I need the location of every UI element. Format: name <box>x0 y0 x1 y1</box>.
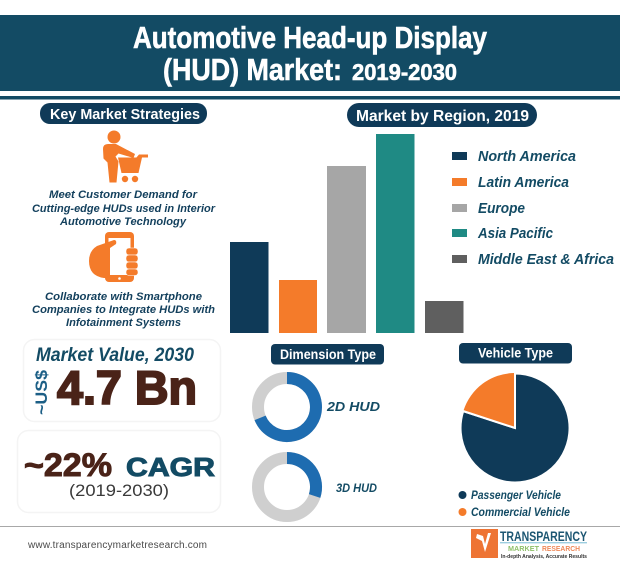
heading: dimension type: Dimension Type <box>280 347 376 362</box>
donut chart: 2D HUD <box>258 378 316 436</box>
heading: market by region: Market by Region, 2019 <box>356 108 529 125</box>
logo <box>471 529 587 560</box>
panel: CAGR: CAGR <box>126 452 215 482</box>
panel: market value: 4.7 Bn <box>57 361 197 414</box>
chart legend: regions: Europe <box>478 200 525 217</box>
panel: market value <box>24 340 220 422</box>
chart legend: regions: North America <box>478 148 576 165</box>
text: strategy one: Automotive Technology <box>59 216 187 228</box>
label: 3D HUD: 3D HUD <box>336 481 377 495</box>
logo: In-depth Analysis, Accurate Results <box>501 554 587 560</box>
heading: vehicle type <box>459 343 572 364</box>
heading: key market strategies: Key Market Strategies <box>50 107 200 123</box>
heading: key market strategies <box>40 103 207 124</box>
logo: MARKET <box>508 546 540 553</box>
chart legend: regions <box>452 148 614 268</box>
footer divider <box>0 526 620 527</box>
title <box>133 20 488 87</box>
website url: www.transparencymarketresearch.com <box>27 540 207 551</box>
text: strategy one: Meet Customer Demand for <box>49 189 198 201</box>
chart legend: vehicle type <box>458 490 571 519</box>
title: Automotive Head-up Display <box>133 20 488 55</box>
heading: dimension type <box>271 344 384 364</box>
chart legend: vehicle type: Passenger Vehicle <box>471 490 562 502</box>
chart legend: regions: Middle East & Africa <box>478 251 614 268</box>
heading: vehicle type: Vehicle Type <box>478 346 553 360</box>
logo: TRANSPARENCY <box>500 529 587 544</box>
label: 2D HUD: 2D HUD <box>326 399 381 414</box>
heading: market by region <box>347 103 537 127</box>
title: (HUD) Market: <box>163 52 342 87</box>
chart legend: regions: Asia Pacific <box>477 225 554 242</box>
icon: hand holding smartphone <box>89 232 138 282</box>
text: strategy one: Cutting-edge HUDs used in Interior <box>32 203 216 215</box>
panel: CAGR: (2019-2030) <box>69 481 169 500</box>
logo: RESEARCH <box>542 546 580 553</box>
text: strategy two: Infotainment Systems <box>66 317 181 329</box>
panel: market value: Market Value, 2030 <box>36 345 194 366</box>
icon: shopper with cart <box>103 130 148 182</box>
text: strategy one <box>32 189 216 228</box>
chart legend: vehicle type: Commercial Vehicle <box>471 507 571 519</box>
panel: market value: ~US$ <box>32 369 51 415</box>
panel: CAGR: ~22% <box>24 447 112 483</box>
bar chart: market by region <box>230 134 464 333</box>
text: strategy two <box>32 291 215 329</box>
pie chart: vehicle type <box>461 373 570 482</box>
panel: CAGR <box>18 430 220 512</box>
chart legend: regions: Latin America <box>478 174 569 191</box>
text: strategy two: Collaborate with Smartphone <box>45 291 202 303</box>
donut chart: 3D HUD <box>258 458 316 516</box>
text: strategy two: Companies to Integrate HUDs with <box>32 304 215 316</box>
header band <box>0 15 620 100</box>
title: 2019-2030 <box>352 59 457 85</box>
